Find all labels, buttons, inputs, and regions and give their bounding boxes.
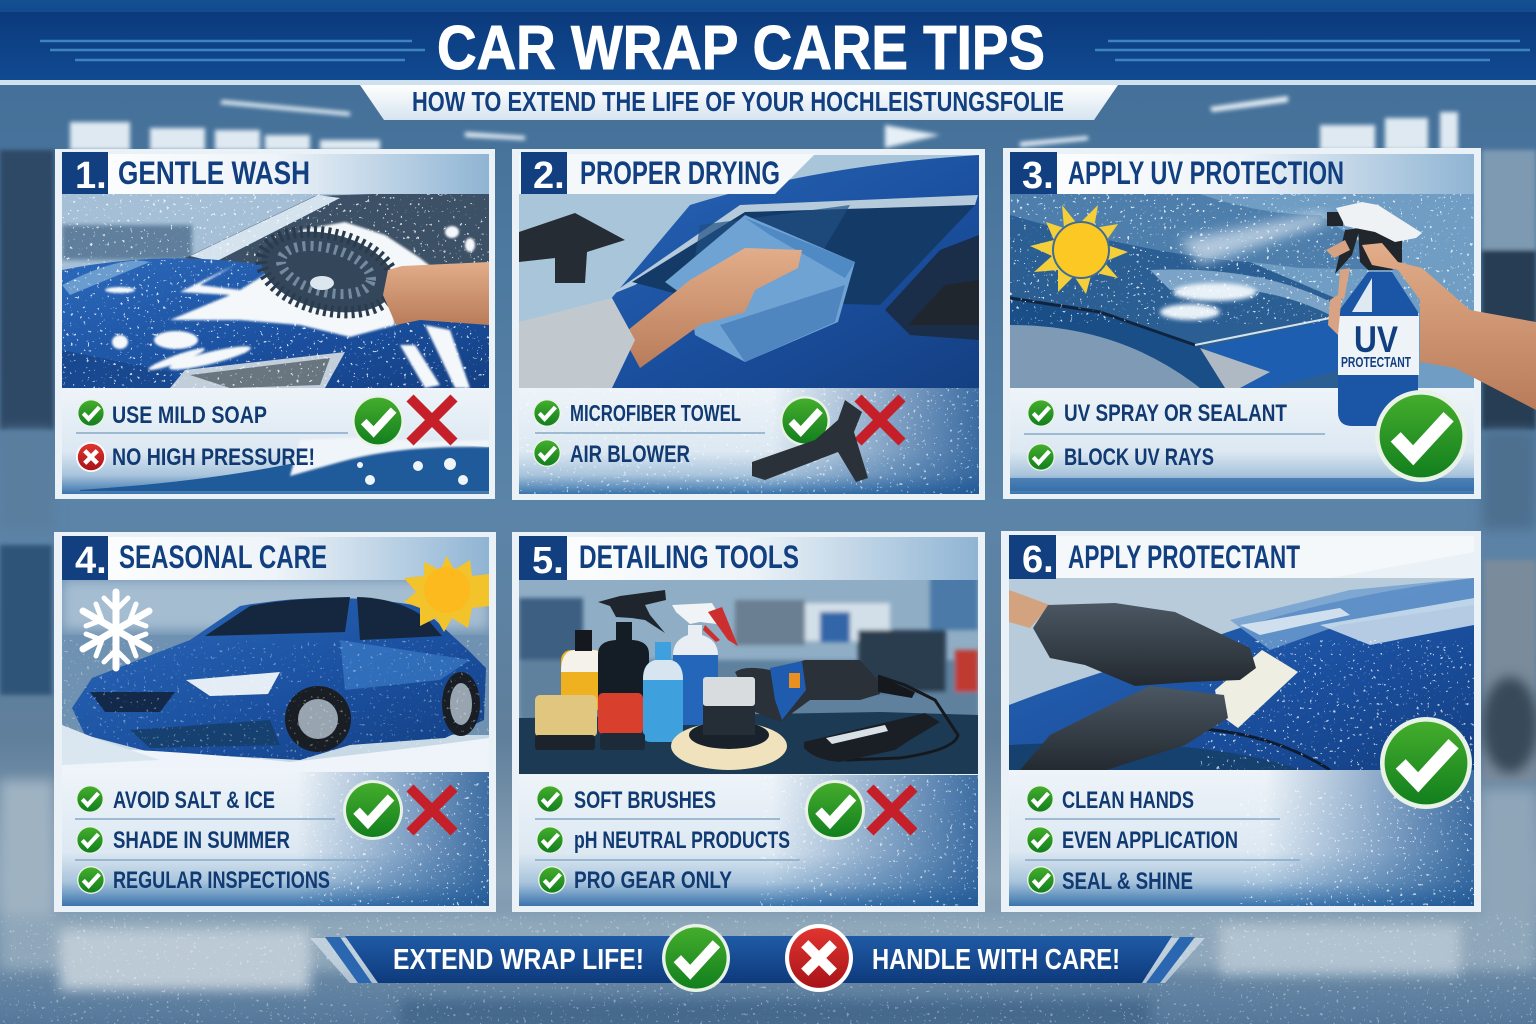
checklist: BLOCK UV RAYS [1064, 444, 1214, 471]
header strip [1010, 152, 1474, 197]
icon: cross [785, 924, 853, 992]
photo: UV spray on hood [1010, 194, 1474, 388]
mitt [262, 232, 390, 312]
header strip: 4. [75, 540, 107, 582]
photo: detailing products [519, 570, 979, 774]
header band [0, 0, 1536, 85]
checklist: CLEAN HANDS [1062, 787, 1194, 814]
subtitle ribbon: HOW TO EXTEND THE LIFE OF YOUR HOCHLEISTUNGSFOLIE [412, 86, 1064, 117]
arm [383, 262, 489, 325]
panel 4: seasonal care [54, 532, 496, 912]
checklist [519, 775, 978, 906]
panel 1: gentle wash [55, 149, 495, 499]
panel 6: apply protectant [1001, 531, 1481, 912]
blower [519, 213, 625, 283]
header strip: 1. [75, 155, 107, 197]
spray bottle and hand: UV [1354, 319, 1398, 360]
photo: towel on windshield [519, 155, 979, 388]
checklist: AIR BLOWER [570, 441, 690, 468]
header strip: PROPER DRYING [580, 155, 780, 191]
header strip: 5. [532, 540, 564, 582]
icon: sun [1030, 205, 1128, 294]
checklist: NO HIGH PRESSURE! [112, 444, 315, 471]
icon: air blower [752, 400, 868, 482]
header strip [62, 536, 489, 582]
bottom banner [310, 924, 1205, 992]
icon: applicator pad [1215, 650, 1298, 728]
header strip: APPLY PROTECTANT [1068, 539, 1300, 575]
towel [665, 215, 855, 362]
title: CAR WRAP CARE TIPS [437, 14, 1045, 83]
slogan right: HANDLE WITH CARE! [872, 944, 1120, 976]
header strip [62, 152, 489, 197]
photo: car in snow and sun [62, 580, 489, 772]
foam [105, 222, 475, 388]
checklist [62, 388, 489, 494]
checklist: REGULAR INSPECTIONS [113, 867, 330, 894]
polisher [735, 660, 880, 722]
header strip [519, 152, 815, 197]
checklist: MICROFIBER TOWEL [570, 400, 741, 426]
icon: check [662, 924, 730, 992]
checklist: UV SPRAY OR SEALANT [1064, 400, 1287, 427]
checklist: SOFT BRUSHES [574, 787, 716, 814]
checklist: pH NEUTRAL PRODUCTS [574, 827, 790, 854]
header strip: SEASONAL CARE [119, 539, 327, 575]
photo: gloved hands with applicator [1009, 578, 1474, 772]
icon: big check [1375, 390, 1467, 482]
checklist [62, 772, 489, 906]
spray bottle and hand [1326, 202, 1536, 426]
slogan left: EXTEND WRAP LIFE! [393, 944, 644, 976]
device [804, 713, 940, 762]
panel 5: detailing tools [512, 532, 985, 912]
checklist [1010, 388, 1474, 494]
icon: snowflake [83, 592, 149, 668]
header strip: APPLY UV PROTECTION [1068, 155, 1344, 191]
panel 2: proper drying [512, 149, 985, 500]
header strip: 2. [533, 155, 565, 197]
checklist [519, 388, 979, 494]
header strip [1009, 535, 1474, 581]
checklist [1009, 770, 1474, 906]
icon: big check [1380, 717, 1472, 809]
checklist: USE MILD SOAP [112, 402, 267, 429]
gloves [1033, 603, 1256, 686]
photo: washing mitt on hood [62, 190, 489, 388]
checklist: AVOID SALT & ICE [113, 787, 275, 814]
header strip [519, 536, 978, 582]
icon: sun [404, 556, 489, 632]
checklist: SEAL & SHINE [1062, 868, 1193, 895]
bottles [561, 650, 598, 710]
header strip: GENTLE WASH [118, 155, 310, 191]
hand and sleeve [622, 248, 802, 368]
header strip: 6. [1022, 539, 1054, 581]
panel 3: apply UV protection [1003, 148, 1536, 499]
brushes [535, 695, 597, 737]
spray bottle and hand: PROTECTANT [1341, 354, 1411, 371]
header strip: DETAILING TOOLS [579, 539, 799, 575]
checklist: SHADE IN SUMMER [113, 827, 290, 854]
header strip: 3. [1022, 155, 1054, 197]
checklist: EVEN APPLICATION [1062, 827, 1238, 854]
checklist: PRO GEAR ONLY [574, 867, 732, 894]
